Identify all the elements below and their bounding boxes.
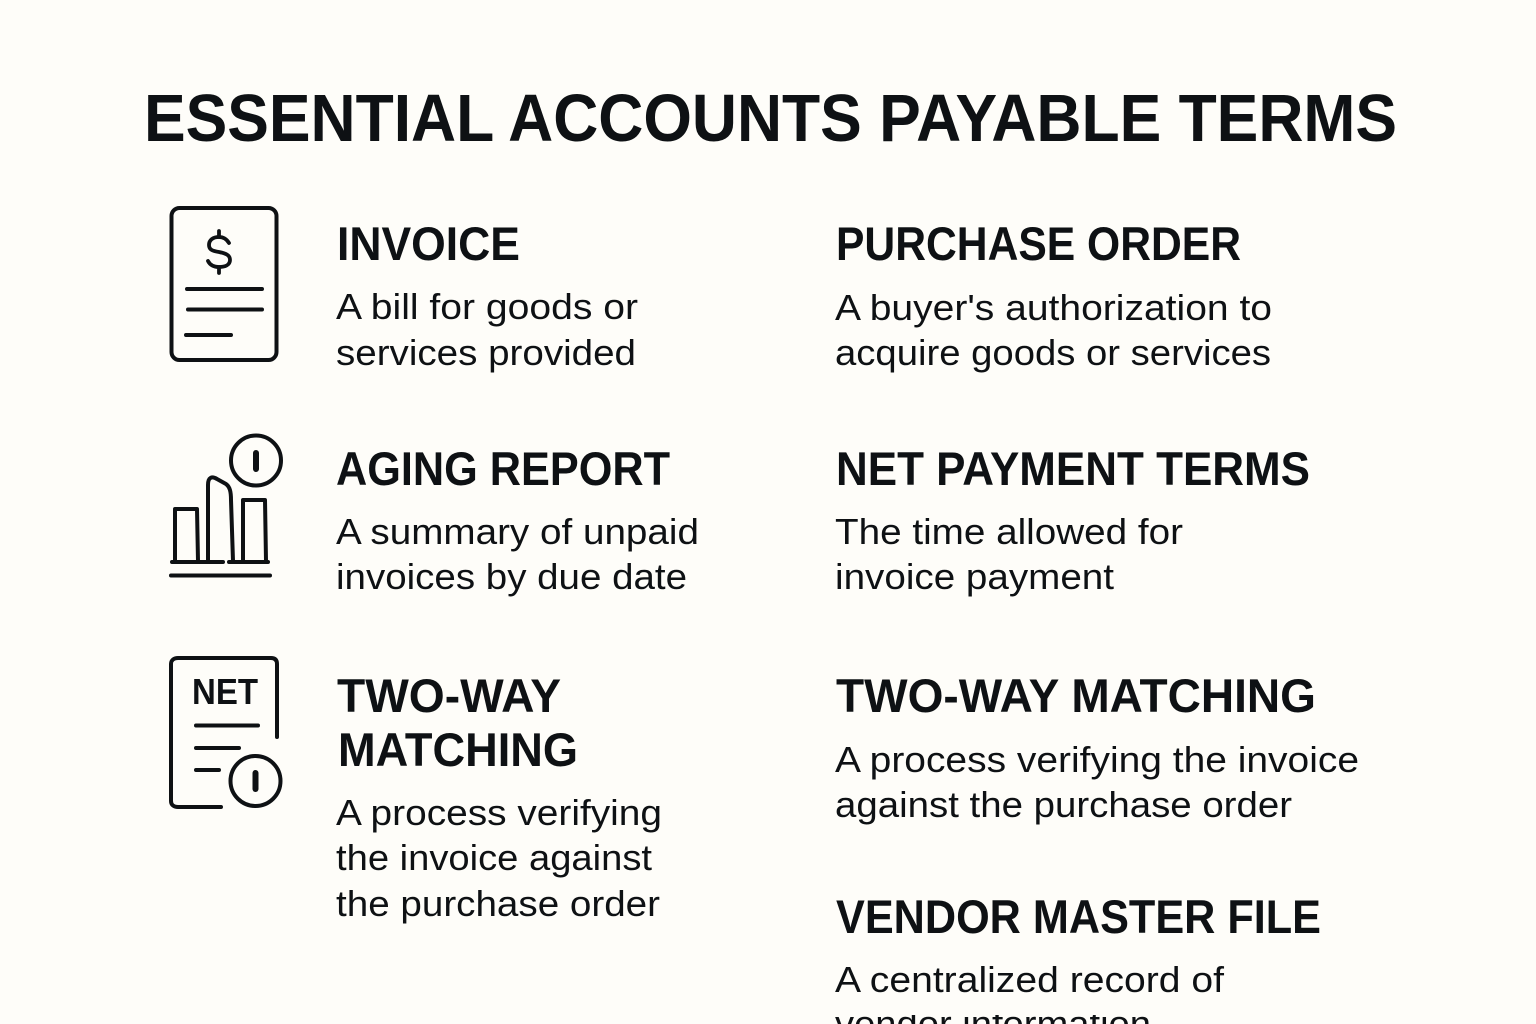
text: two-way matching right description (835, 739, 1359, 825)
panel: two-way matching left (336, 669, 662, 924)
text: aging report description: invoices by due date (336, 556, 687, 597)
text: purchase order description (835, 287, 1272, 373)
text: vendor master file description (835, 966, 1224, 1024)
text: invoice description (336, 286, 638, 373)
text: purchase order description: acquire goods or services (835, 332, 1271, 373)
icon: invoice document with dollar sign (172, 208, 276, 360)
panel: aging report (336, 442, 699, 597)
text: two-way matching right description: A process verifying the invoice (835, 739, 1359, 780)
panel: net payment terms (835, 442, 1310, 597)
text: two-way matching right description: against the purchase order (835, 784, 1292, 825)
heading: invoice: INVOICE (337, 217, 520, 270)
text: net payment terms description: invoice payment (835, 556, 1114, 597)
panel: two-way matching right (835, 669, 1359, 825)
heading: two-way matching left: MATCHING (338, 723, 578, 776)
icon: net document with coin: NET (192, 671, 258, 712)
panel: vendor master file (835, 890, 1321, 1024)
panel: invoice (336, 217, 638, 373)
title: ESSENTIAL ACCOUNTS PAYABLE TERMS (144, 81, 1397, 156)
text: vendor master file description: A centralized record of (835, 959, 1225, 1000)
text: purchase order description: A buyer's authorization to (835, 287, 1272, 328)
text: two-way matching left description: the purchase order (336, 883, 660, 924)
heading: purchase order: PURCHASE ORDER (836, 217, 1241, 270)
heading: two-way matching left (337, 669, 578, 776)
heading: net payment terms: NET PAYMENT TERMS (836, 442, 1310, 495)
text: invoice description: services provided (336, 332, 636, 373)
heading: two-way matching right: TWO-WAY MATCHING (836, 669, 1316, 722)
heading: vendor master file: VENDOR MASTER FILE (836, 890, 1321, 943)
text: net payment terms description (835, 511, 1183, 597)
icon: net document with coin (171, 658, 280, 807)
text: two-way matching left description: A process verifying (336, 792, 662, 833)
text: two-way matching left description: the invoice against (336, 837, 652, 878)
text: aging report description (336, 511, 699, 597)
heading: aging report: AGING REPORT (336, 442, 670, 495)
text: aging report description: A summary of unpaid (336, 511, 699, 552)
panel: purchase order (835, 217, 1272, 373)
icon: aging report bar chart with coin (171, 436, 281, 576)
text: net payment terms description: The time allowed for (835, 511, 1183, 552)
text: two-way matching left description (336, 792, 662, 924)
heading: two-way matching left: TWO-WAY (337, 669, 561, 722)
text: invoice description: A bill for goods or (336, 286, 638, 327)
